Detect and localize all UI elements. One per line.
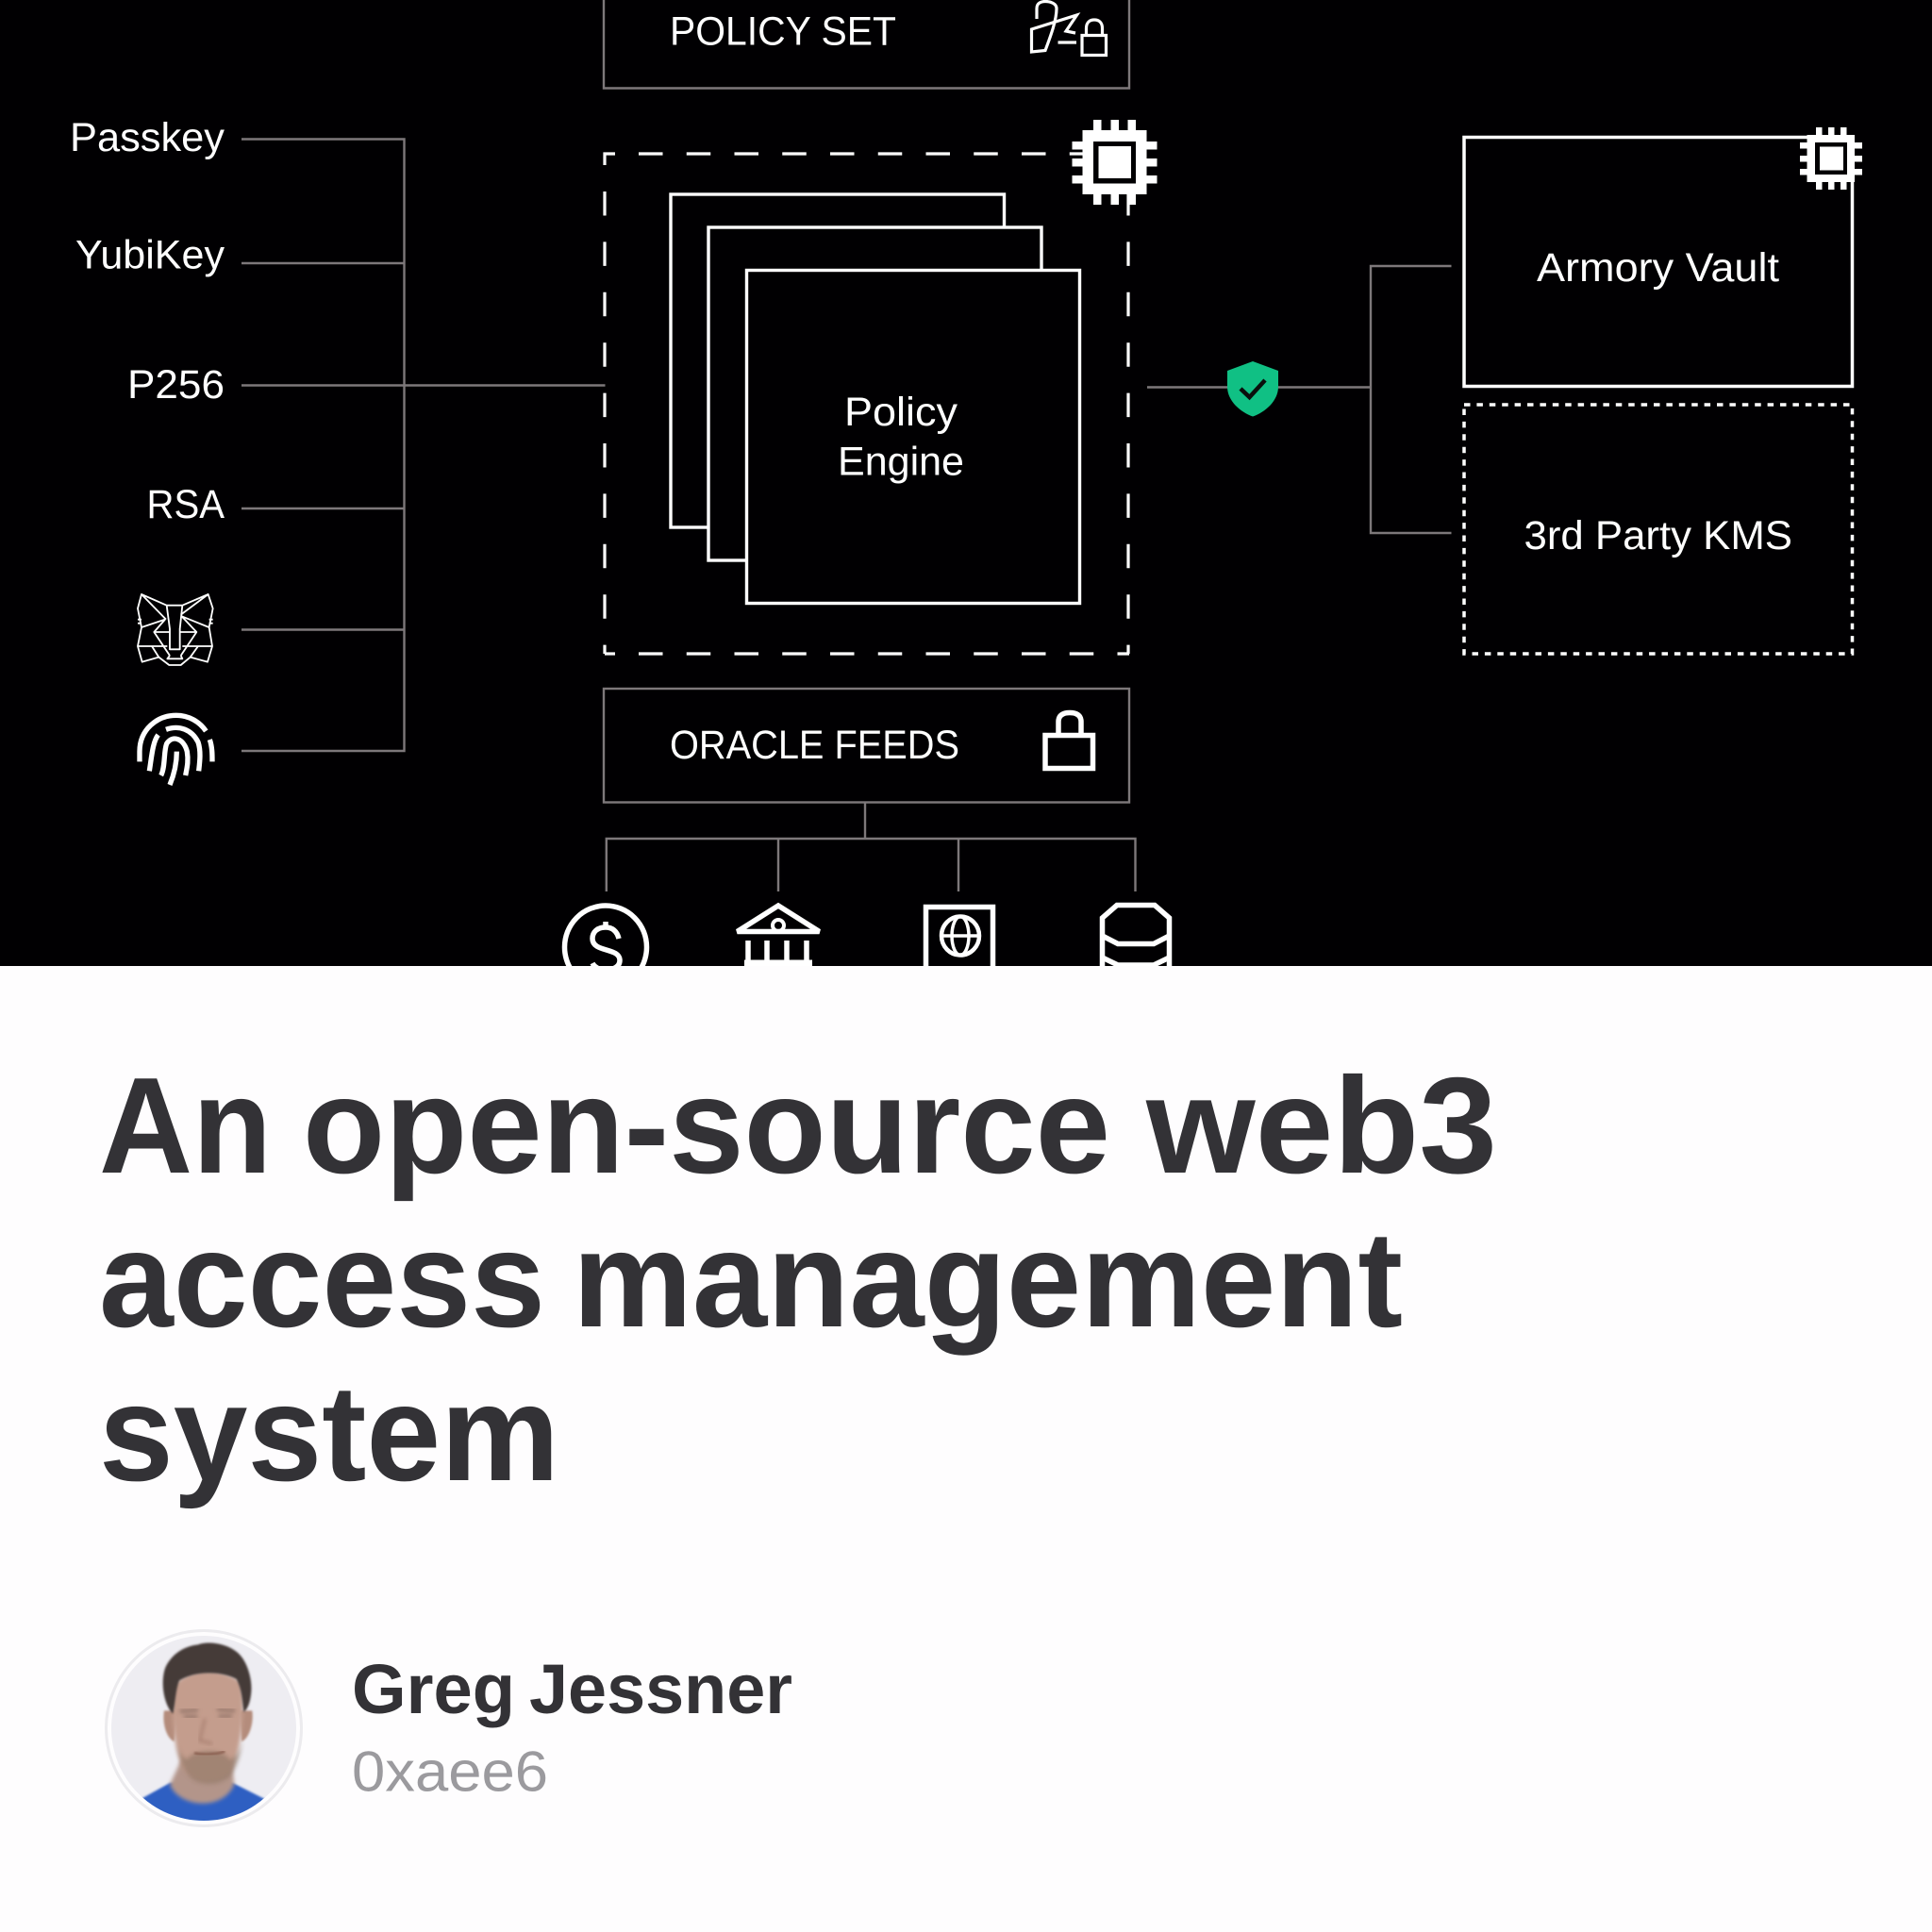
title: web3 <box>1145 1049 1497 1202</box>
portrait beard <box>176 1740 242 1784</box>
panel: architecture diagram <box>0 0 1932 989</box>
panel: policy set box <box>604 0 1129 89</box>
connector tree: oracle sources <box>607 803 1136 891</box>
avatar: portrait <box>106 1630 302 1846</box>
title: system <box>99 1357 559 1509</box>
label: YubiKey: YubiKey <box>75 232 225 277</box>
label: oracle feeds: ORACLE FEEDS <box>670 723 959 768</box>
author handle: 0xaee6 <box>352 1740 548 1804</box>
label: policy set: POLICY SET <box>670 9 896 55</box>
label: RSA: RSA <box>147 482 225 527</box>
icon: bank <box>738 906 819 963</box>
author name <box>352 1650 792 1728</box>
portrait ears <box>163 1710 253 1741</box>
connector tree: key sources <box>242 140 606 751</box>
icon: database stack <box>1102 906 1170 972</box>
icon: fox wallet <box>138 594 213 665</box>
icon: fingerprint <box>140 715 212 785</box>
icon: lock <box>1045 713 1092 768</box>
icon: passport globe <box>926 908 992 972</box>
icon: dollar coin <box>562 903 649 966</box>
label: third party kms: 3rd Party KMS <box>1524 513 1792 558</box>
author name: Greg <box>352 1650 515 1728</box>
title: management <box>573 1203 1403 1356</box>
panel: armory vault <box>1464 127 1862 387</box>
title: access <box>99 1203 545 1356</box>
portrait nose shade <box>200 1719 212 1743</box>
label: policy engine: Policy <box>844 390 958 435</box>
connector: engine to vaults <box>1147 266 1451 533</box>
portrait brows and eyes <box>180 1709 235 1717</box>
portrait mouth <box>194 1752 225 1755</box>
portrait neck <box>170 1757 234 1804</box>
label: armory vault: Armory Vault <box>1537 245 1779 291</box>
label: policy engine <box>841 396 962 483</box>
author name: Jessner <box>529 1650 792 1728</box>
label: Passkey: Passkey <box>70 115 225 160</box>
portrait hair <box>163 1642 251 1714</box>
stacked policy cards <box>671 194 1079 604</box>
label: P256: P256 <box>127 362 225 408</box>
icon: signature and lock <box>1032 2 1106 55</box>
panel: policy engine enclosure <box>605 120 1157 654</box>
icon: chip small <box>1800 127 1862 190</box>
title <box>99 1049 1497 1509</box>
dashed enclosure <box>605 154 1129 654</box>
panel: oracle feeds <box>564 689 1170 989</box>
source labels and connectors <box>70 115 606 785</box>
icon: green shield <box>1227 361 1278 417</box>
icon: chip large <box>1072 120 1157 205</box>
panel: third party KMS <box>1464 405 1853 654</box>
portrait shirt <box>142 1781 265 1821</box>
label: policy engine: Engine <box>838 440 964 485</box>
title: An <box>99 1049 272 1202</box>
title: open-source <box>303 1049 1110 1202</box>
portrait face <box>172 1671 243 1781</box>
